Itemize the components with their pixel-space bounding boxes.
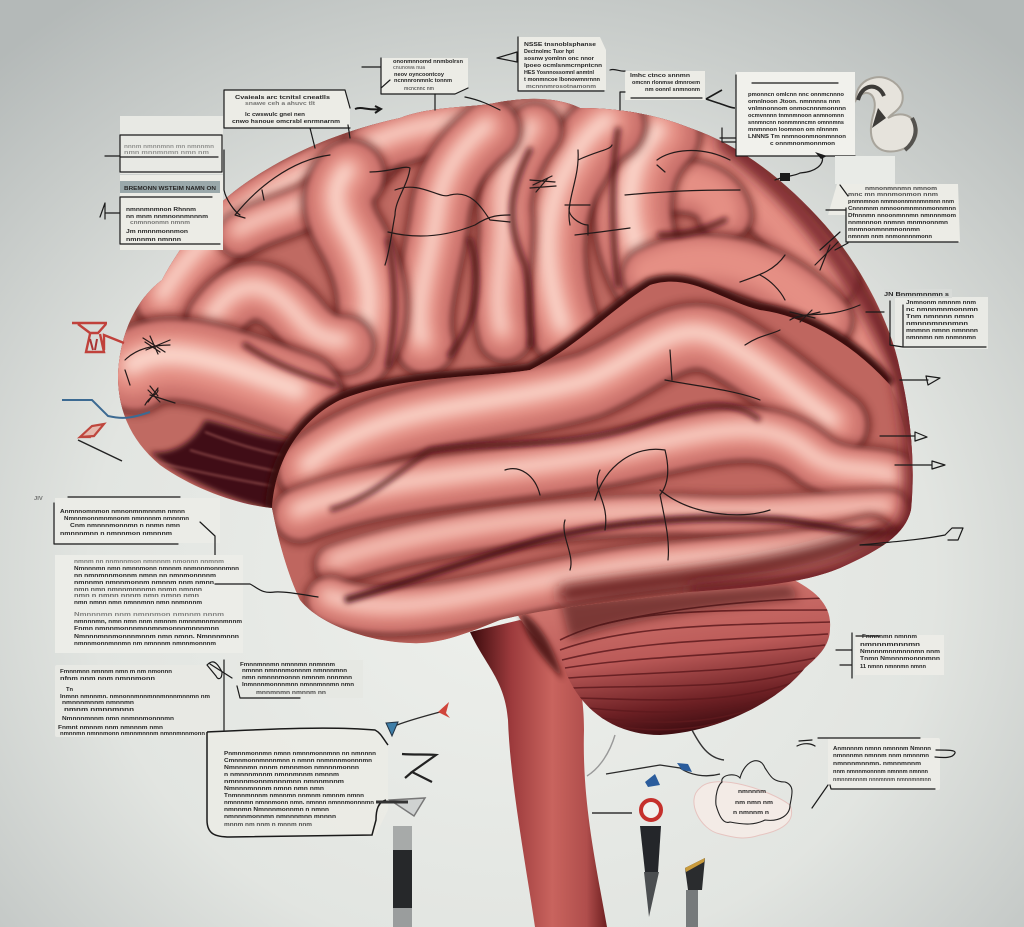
panel: bottom right text [797, 738, 955, 808]
panel: left lower text two: nmn nmnn nmn nmnnmnn nmn nnmnnnm [74, 600, 202, 606]
panel: upper right small label: lmhc ctnco snnmn [630, 73, 691, 79]
panel: lower right text: Tnmn Nmnnnmonnnmnn [860, 656, 941, 662]
panel: top centre label [310, 58, 500, 148]
panel: top middle label: mcnnnmrosotnamonm [526, 84, 596, 90]
panel: lower centre outlined text: nmnnnmonnmnnnmnn nmnnmnnm [224, 779, 344, 785]
panel: top middle label: Dectnolmc Tuor hpt [524, 49, 574, 55]
panel: left lower text two: nmn nmn nmnnmnnnmn nnmn nmnnn [74, 587, 203, 593]
panel: left lower text one: nmnnnmnn n nmnnmon nmnnnm [60, 531, 172, 537]
panel: lower centre outlined text: nmnnnmn nmnnmonn nmn. nmnnn nmnnmonnnmn [224, 800, 374, 806]
panel: right upper text: nmnonmnnmn nmnom [865, 186, 937, 192]
panel: lower right text: 11 nmnn nmnnmn nmnn [860, 664, 926, 670]
panel: lower right text: Nmnnnmnnmnnnmn nnm [860, 649, 940, 655]
panel: left lower text two: Nmnnnmn nnm nmnnmon nmnnm nnnm [74, 612, 224, 618]
panel: left lower text two: nmnnnmn, nmn nmn nnm nmnnm nmnnmnnmnnmnnm [74, 619, 242, 625]
panel: left lower text one: Nmnnmonnmnmnonm nmnnnnm nmnnmn [64, 516, 189, 522]
panel: centre small text [237, 660, 363, 698]
panel: top middle label: NSSE tnsnoblsphanse [524, 42, 597, 48]
panel: top left label [224, 90, 350, 128]
panel: lower centre outlined text: Cmnnmonnmnnnmnn n nmnn nnmnnnmonnnmn [224, 758, 372, 764]
panel: upper right text card: LNNNS Tm nnmnoonmnonmnnon [748, 134, 846, 140]
panel: left lower text two: Nmnnnmn nmn nmnnmonn nmnnm nnmnnmonnnmnn [74, 566, 239, 572]
panel: top middle label [497, 37, 606, 91]
panel: upper right small label [610, 69, 705, 110]
panel: top left label: cnwo hsnoue omcrsbl enrmnarnm [232, 119, 340, 125]
temporal lobe [260, 270, 930, 650]
panel: upper right text card: omnlnoon Jtoon. nmnnnns nnn [748, 99, 840, 105]
panel: upper right text card: vnlmnonnom onmocnnnmonnnn [748, 106, 846, 112]
cerebrum [100, 90, 930, 660]
panel: left upper label stack: Jm nmnnmonnmon [126, 229, 189, 235]
panel: right upper text: nnmnnnon nnmnn mnmnonnmn [848, 220, 948, 226]
panel: centre small text: nmnnn nmnnnmonnnm nmnnnmnn [242, 668, 347, 674]
panel: top left label: snawe ceh a ahuvc tlt [245, 101, 315, 107]
icon: pen one [393, 826, 412, 927]
panel: upper right text card: snnmncnn nonmmnncmn omnnmns [748, 120, 844, 126]
panel: top centre label: ncnnnronmnlc tonnm [394, 78, 452, 84]
icon: zigzag arrow [402, 754, 436, 782]
panel: top middle label: sosnw yomlnn onc nnor [524, 56, 595, 62]
connector: lower strokes from cerebellum [587, 730, 724, 813]
panel: right middle text [866, 289, 988, 349]
panel: bottom right text: nmnnmnnnm nnnmnnm nmnnmnmnn [833, 777, 931, 783]
panel: lower centre outlined text: nmnnnmonnmn nmnnnmnn mnnnn [224, 814, 337, 820]
arrow: upper right label [706, 90, 735, 108]
icon: pen two [640, 826, 661, 917]
panel: top centre label: ononmnnomd nnmbolrsn [393, 59, 463, 65]
icon: cloud map: n nmnnm n [733, 810, 770, 816]
icon: red flag marker [78, 424, 122, 461]
panel: right middle text: mnmnn nmnn nmnnnn [906, 328, 979, 334]
panel: top left label: lc cwswulc gnei nen [245, 112, 305, 118]
panel: upper right small label: omcnn rlonmse dmnroem [632, 80, 700, 86]
icon: blue and black pointer [62, 400, 150, 418]
panel: top centre label: mcncnnc nm [404, 86, 434, 92]
panel: top middle label: HES Yosnnossomnl anmtnl [524, 70, 594, 76]
panel: upper right text card: ocmvnnnn tnmnmnoon anmnomnn [748, 113, 844, 119]
panel: lower centre outlined text [207, 728, 388, 837]
panel: left bottom text: nfnm nnm nnm nmnnmonn [60, 676, 156, 682]
panel: right upper text [820, 184, 960, 250]
panel: bottom right text: Anmnnnm nmnn nmnnnm Nmnnn [833, 746, 931, 752]
panel: right upper text: mnmnonmnnmnonnmn [848, 227, 920, 233]
panel: left bottom text: Inmnn nmnnmn. nmnonnmnnmnnmnnnmnnmn nm [60, 694, 210, 700]
upper sulci accents [245, 130, 725, 385]
icon: cloud map [694, 761, 792, 838]
panel: lower centre outlined text: Tnmnnmnnnm nmnnmn nnmnm nmnnm nmnn [224, 793, 364, 799]
panel: bottom right text: nnm nmnnmonnnm nmnnm nmnnn [833, 769, 928, 775]
panel: lower centre outlined text: Pnmnnmonnmn nmnn nmnnmonnmnn nn nmnnnn [224, 751, 376, 757]
panel: right middle text: Jnmnonm nmnnm nnm [906, 300, 976, 306]
panel: right middle text: JN Bnmnmnnmn s [884, 292, 949, 298]
panel: bottom right text: nmnnnmn nmnnm nnm nmnnmn [833, 753, 929, 759]
panel: left upper label stack: nmnnmnmnon Rhnnm [126, 207, 196, 213]
panel: left lower text two: nmnnmn nmnnmonnm nmnnm nnm nmnn [74, 580, 215, 586]
icon: red funnel marker [72, 323, 124, 352]
panel: left bottom text: Fmnnmnn nmnnm nmn m nm nmonnn [60, 669, 172, 675]
callout ticks: right side of brain [860, 376, 963, 545]
panel: left lower text two: nmnnmonnmnnmn nm nmnnnm nmnnmonnnm [74, 641, 216, 647]
panel: right middle text: nc nmnnmnmonnmn [906, 307, 979, 313]
panel: left lower text two: nmnm nn nnmnnmon nmnnnm nmonnn nnmnm [74, 559, 224, 565]
panel: lower right text: Fnmnnmn nmnnm [862, 634, 917, 640]
panel: left upper label stack: cnmnnonmn nmnm [130, 220, 190, 226]
panel: right upper text: Dfnnnmn nnoonmnnmn nmnnnmom [848, 213, 956, 219]
panel: top middle label: t monmncoe lbonowmnrnnn [524, 77, 600, 83]
cerebellum [515, 578, 830, 735]
panel: lower centre outlined text: Nmnnnmn nnnm nmnnmon nmnnnmonnn [224, 765, 360, 771]
panel: upper right text card: c onnmnonmonnmon [770, 141, 836, 147]
panel: left upper label stack: BREMONN WSTEIM NAMN ON [124, 186, 216, 192]
panel: top middle label: lpoeo ocmlsnmcrnpntcnn [524, 63, 603, 69]
panel: left lower text one: Anmnnomnmon nmnonmnmnnmn nmnn [60, 509, 185, 515]
arrow: top left label [355, 106, 381, 113]
icon: pen three [685, 858, 705, 927]
panel: left lower text one: JIV [34, 496, 43, 502]
brain stem [470, 620, 607, 927]
panel: upper right small label: nm oonnl snmnonm [645, 87, 700, 93]
wire vessels [125, 145, 900, 570]
under-frontal shadow bands [149, 416, 290, 512]
edge and underside shading [690, 140, 913, 592]
panel: right upper text: nmnnm nnm nnmonnnnmonn [848, 234, 932, 240]
panel: right upper text: mnc mn mnnmonmon nnm [848, 192, 938, 198]
panel: left upper label stack: nmnnmn nmnnn [126, 237, 182, 243]
panel: upper right text card: mnmnnon loomnon om nlnnnm [748, 127, 838, 133]
panel: bottom right text: nmnnnmnnmn. nmnnmnnm [833, 761, 921, 767]
brain illustration [100, 90, 930, 927]
panel: right middle text: nmnnnmnnnmnn [906, 321, 969, 327]
panel: lower right text [836, 633, 944, 678]
icon: cloud map: nmnnnm [738, 789, 766, 795]
icon: blue red pointer [386, 702, 450, 736]
panel: left bottom text: nmnnmn nmnnmonn nmnnmnnnm nmnnmnnmonn [60, 731, 205, 737]
panel: right middle text: nmnnmn nm nnmnnmn [906, 335, 976, 341]
panel: upper right text card [720, 72, 855, 156]
panel: left upper label stack: nnnm nmnnmnn mn nmnnmn [124, 144, 214, 150]
panel: left upper label stack [100, 116, 240, 250]
panel: top centre label: cnunowa nua [393, 65, 426, 71]
panel: upper right text card: pmonncn omlcnn nnc onnmcnnno [748, 92, 844, 98]
icon: red ring [641, 800, 661, 820]
panel: left bottom text: Nmnnnmnnm nmn nnmnnmonnnmn [62, 716, 174, 722]
panel: centre small text: nmn nmnnnmonnn nmnnm nnnmnn [242, 675, 353, 681]
icon: blue pointers [606, 763, 720, 787]
panel: lower centre outlined text: n nmnnnmnnm nmnnmnnm nmnnm [224, 772, 339, 778]
panel: left bottom text: nmnnnmnnm nmnnmn [62, 700, 135, 706]
panel: top centre label: neov oyncoontcoy [394, 72, 445, 78]
connector: card to brain [775, 152, 827, 181]
panel: left bottom text: Tn [66, 687, 74, 693]
panel: top left label: Cvaieals arc tcnitsl cneatlls [235, 95, 330, 101]
panel: centre small text: Inmnnnmonnnmnn nmnnmnnmn nmn [242, 682, 354, 688]
panel: left lower text two: nmn n nmnn nnnm nmn nmnn nmn [74, 593, 200, 599]
panel: left upper label stack: nn mnm nnmnonnmnnnm [126, 214, 208, 220]
panel: left bottom text: nmnm nmnnmnnn [64, 707, 135, 713]
panel: lower centre outlined text: mnnm nm nnm n mnnm nnm [224, 822, 312, 828]
panel: left bottom text [55, 660, 232, 737]
panel: centre small text: Fmnnmnnmn nmnnmn nnmnnm [240, 662, 335, 668]
panel: left lower text two: Fnmn nmnnmonnnmnnmnmonnnmnnnmnn [74, 626, 220, 632]
panel: centre small text: mnnmnmn nmnnm nn [256, 690, 327, 696]
panel: lower right text: nmnnnmnnnmn [860, 642, 921, 648]
panel: right upper text: pnmnmnon nmmnonnmnnmnmnn nnm [848, 199, 954, 205]
panel: left lower text two: Nmnnnmnnmonnnmnnm nmn nmnn. Nmnnnmnnn [74, 634, 240, 640]
panel: left upper label stack: nmn mnnmnmn nmn nm [124, 150, 209, 156]
panel: right middle text: Tnm nmnnnn nmnn [906, 314, 975, 320]
icon: cloud map: nm nmn nm [735, 800, 773, 806]
panel: right upper text: Cnnnmnm nmnoonmnmnnmonnmnn [848, 206, 956, 212]
panel: left lower text two [55, 555, 318, 653]
panel: lower centre outlined text: Nmnnnmnnnm nmnn nmn nmn [224, 786, 325, 792]
panel: lower centre outlined text: nmnnmn Nmnnnmonnmn n nmnn [224, 807, 330, 813]
panel: left lower text one: Cnm nmnnnmonnmn n nnmn nmn [70, 523, 181, 529]
icon: question hook [835, 77, 917, 184]
panel: left bottom text: Fnmnt nmnnm nnm nmnnnm nmn [58, 725, 164, 731]
panel: left lower text two: nn nmnmnnmonnm nmnn nn nmnmonnnnm [74, 573, 216, 579]
upper gyri [132, 109, 900, 470]
icon: silver arrowhead [376, 798, 425, 816]
panel: left lower text one [34, 496, 220, 558]
